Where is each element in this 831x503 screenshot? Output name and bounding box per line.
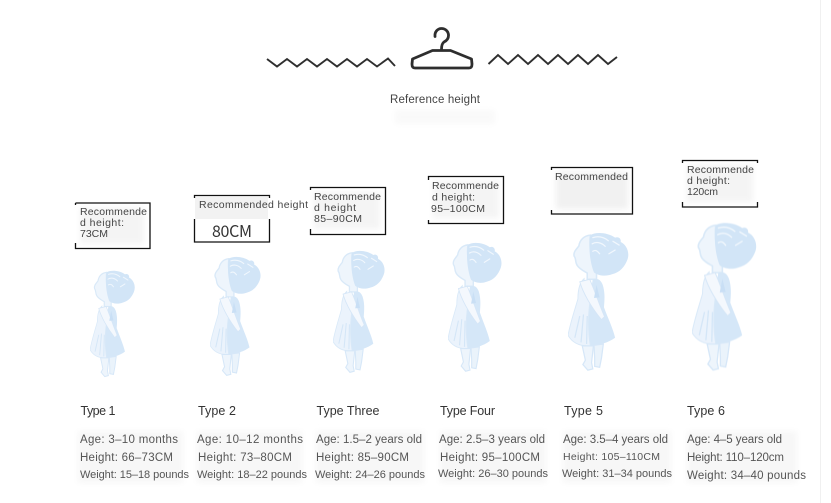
header ornament — [267, 28, 617, 68]
size details: Age: 3–10 months — [80, 434, 178, 446]
recommended height box: Recommended height — [199, 199, 308, 211]
recommended height box: 85–90CM — [314, 213, 362, 225]
size details: Type Three — [316, 404, 380, 418]
size details: Height: 85–90CM — [316, 452, 409, 464]
recommended height box — [76, 203, 150, 248]
recommended height box: Recommende — [687, 164, 754, 176]
recommended height box: 95–100CM — [431, 203, 485, 215]
size details: Height: 110–120cm — [687, 452, 784, 464]
size details: Weight: 34–40 pounds — [687, 470, 806, 482]
size column: type 5 — [552, 168, 672, 483]
size details — [687, 404, 806, 483]
size details: Type 6 — [687, 404, 725, 418]
illustration: girl — [692, 223, 756, 370]
recommended height box: d height: — [80, 217, 124, 229]
size details — [438, 404, 548, 483]
recommended height box: Recommende — [80, 206, 147, 218]
size details: Height: 73–80CM — [198, 452, 292, 464]
size details: Age: 10–12 months — [197, 434, 303, 446]
recommended height box: d height: — [432, 192, 475, 204]
size details: Weight: 18–22 pounds — [197, 469, 308, 481]
recommended height box: 80CM — [212, 218, 252, 242]
size details: Age: 3.5–4 years old — [563, 434, 668, 446]
size column: type three — [310, 188, 426, 483]
recommended height box: Recommende — [314, 191, 381, 203]
recommended height box — [310, 188, 386, 234]
recommended height box: 73CM — [80, 228, 108, 240]
size details: Age: 2.5–3 years old — [439, 434, 545, 446]
size details: Weight: 24–26 pounds — [315, 469, 426, 481]
size details: Weight: 26–30 pounds — [438, 468, 548, 480]
left zigzag — [267, 58, 395, 66]
size column: type four — [428, 176, 548, 483]
size details: Height: 105–110CM — [563, 451, 660, 463]
illustration: girl — [333, 251, 385, 372]
recommended height box: d height: — [687, 175, 730, 187]
size details: Height: 66–73CM — [80, 452, 173, 464]
size column: type 6 — [682, 160, 806, 483]
size details: Weight: 15–18 pounds — [80, 469, 190, 481]
size details: Type Four — [440, 404, 495, 418]
size column: type 1 — [76, 203, 190, 483]
size details: Weight: 31–34 pounds — [562, 468, 672, 480]
size details: Height: 95–100CM — [440, 452, 540, 464]
recommended height box: Recommended — [555, 171, 628, 183]
recommended height box — [552, 168, 632, 214]
recommended height box: Recommende — [432, 180, 499, 192]
illustration: girl — [568, 233, 628, 370]
recommended height box: d height — [314, 202, 356, 214]
size details: Type 2 — [198, 404, 236, 418]
size details: Age: 4–5 years old — [687, 434, 782, 446]
size details — [315, 404, 426, 483]
right zigzag — [488, 55, 617, 64]
illustration: girl — [448, 243, 501, 371]
illustration: girl — [210, 257, 261, 375]
recommended height box — [682, 160, 758, 207]
page edge line — [820, 0, 821, 503]
size details — [78, 404, 190, 483]
size details: Type 5 — [564, 404, 603, 418]
size column: type 2 — [194, 196, 308, 483]
heading: reference height: Reference height — [390, 94, 481, 106]
recommended height box — [428, 176, 504, 224]
size details: Type 1 — [80, 404, 116, 418]
size details — [197, 404, 308, 483]
recommended height box: 120cm — [687, 186, 718, 198]
faint smudges behind heading — [395, 110, 495, 124]
size details — [562, 404, 672, 483]
size details: Age: 1.5–2 years old — [316, 434, 422, 446]
illustration: girl — [90, 271, 135, 377]
icon: hanger — [412, 28, 472, 68]
recommended height box — [194, 196, 308, 242]
